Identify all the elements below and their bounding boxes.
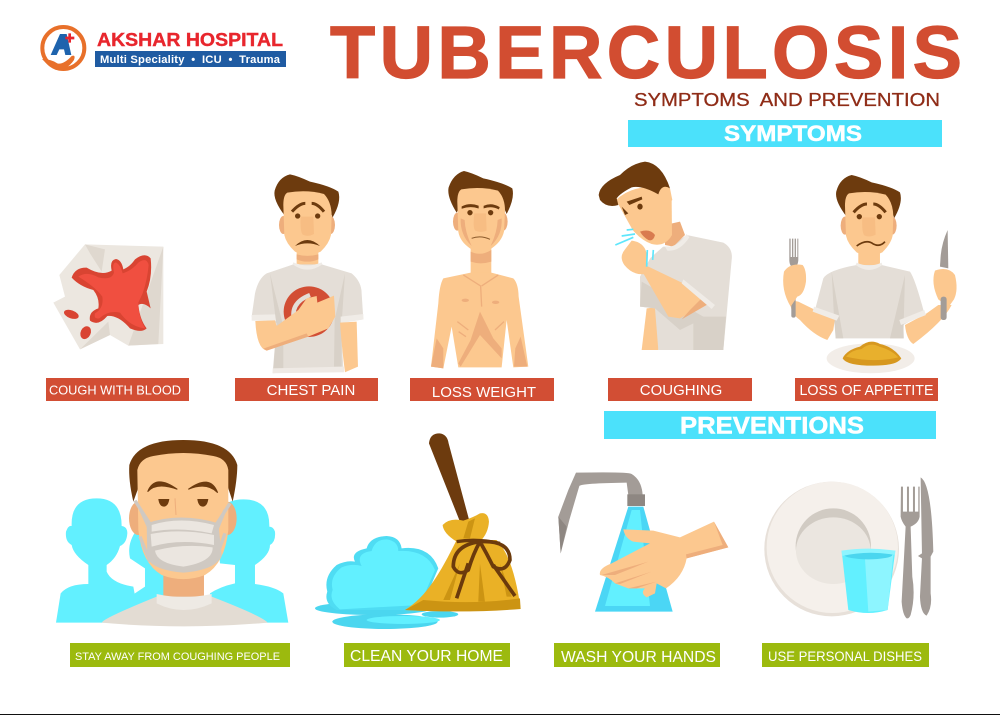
label	[46, 378, 189, 401]
label	[410, 378, 554, 401]
label	[554, 643, 720, 667]
logo: Akshar Hospital	[42, 27, 286, 70]
illustration: broom and dust	[315, 433, 521, 629]
panel: use personal dishes	[762, 477, 933, 667]
label	[608, 378, 752, 401]
label: LOSS OF APPETITE	[800, 383, 934, 399]
label: COUGH WITH BLOOD	[49, 382, 181, 398]
panel: coughing	[599, 162, 752, 401]
panel: chest pain	[235, 174, 378, 401]
label: USE PERSONAL DISHES	[768, 649, 922, 664]
label	[235, 378, 378, 401]
illustration: man holding chest	[252, 174, 363, 373]
panel: loss weight	[410, 171, 554, 401]
illustration: thin man	[431, 171, 528, 368]
label: STAY AWAY FROM COUGHING PEOPLE	[75, 651, 280, 663]
logo tagline bar: Multi Speciality • ICU • Trauma	[100, 54, 281, 66]
illustration: plate glass and cutlery	[764, 477, 933, 618]
label: CLEAN YOUR HOME	[350, 648, 503, 665]
label: LOSS WEIGHT	[432, 384, 536, 401]
panel: wash your hands	[554, 472, 728, 667]
icon: hospital ring emblem	[42, 27, 84, 70]
panel: clean your home	[315, 433, 521, 667]
heading: symptoms	[628, 120, 942, 147]
label	[762, 643, 929, 667]
heading: preventions	[604, 411, 936, 440]
label: COUGHING	[640, 382, 722, 399]
label	[795, 378, 938, 401]
icon: bloody tissue	[53, 244, 163, 349]
panel: cough with blood	[46, 244, 189, 401]
heading: symptoms: SYMPTOMS	[724, 121, 862, 146]
label	[344, 643, 510, 667]
panel: stay away from coughing people	[56, 440, 290, 667]
subtitle: SYMPTOMS AND PREVENTION	[634, 89, 940, 110]
illustration: masked man with silhouettes	[56, 440, 288, 626]
label: CHEST PAIN	[267, 382, 355, 399]
logo name: AKSHAR HOSPITAL	[97, 29, 283, 50]
illustration: man with fork and knife	[783, 175, 957, 373]
illustration: coughing man	[599, 162, 732, 350]
illustration: faucet and hand	[558, 472, 728, 612]
label	[70, 643, 290, 667]
heading: preventions: PREVENTIONS	[680, 412, 864, 440]
label: WASH YOUR HANDS	[561, 649, 716, 666]
title: TUBERCULOSIS	[330, 11, 962, 94]
panel: loss of appetite	[783, 175, 957, 401]
